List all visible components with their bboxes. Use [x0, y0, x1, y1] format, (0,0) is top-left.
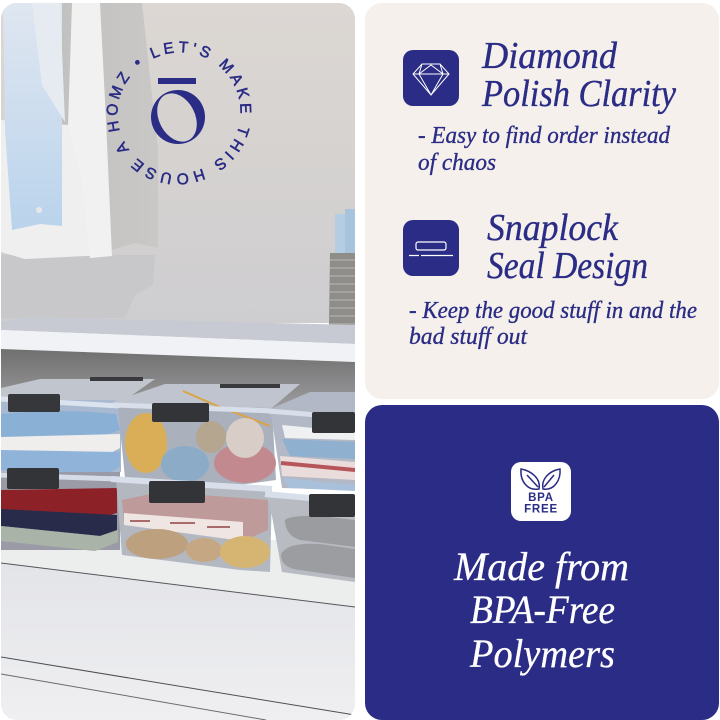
upper shelf: [1, 317, 355, 362]
circular slogan: LET'S MAKE THIS HOUSE A HOMZ •: [106, 41, 252, 185]
wall shadow under clothes: [1, 255, 155, 276]
logo mark: [149, 78, 205, 148]
text: seal description: bad stuff out: [409, 324, 528, 350]
text: clarity description: of chaos: [418, 150, 496, 176]
wall background: [1, 3, 355, 323]
heading: Made from BPA-Free Polymers: Polymers: [469, 631, 615, 676]
text: seal description: [409, 298, 697, 350]
text: seal description: - Keep the good stuff in and the: [409, 298, 697, 324]
heading: Diamond Polish Clarity: Diamond: [481, 35, 618, 77]
heading: Diamond Polish Clarity: Polish Clarity: [481, 73, 676, 115]
text: clarity description: - Easy to find order instead: [418, 123, 671, 149]
storage bin: top right: [268, 392, 355, 491]
books in basket: [335, 209, 355, 254]
lower shelf surface and drawers: [1, 540, 355, 720]
icon: snaplock seal: [403, 220, 459, 276]
panel: features: [365, 3, 719, 399]
heading: Made from BPA-Free Polymers: Made from: [453, 544, 629, 589]
storage bin: bottom middle with textiles and yarn: [111, 479, 272, 572]
hanging clothes: [1, 3, 158, 259]
heading: Made from BPA-Free Polymers: BPA-Free: [470, 587, 615, 632]
icon: BPA free leaf badge: BPA: [528, 492, 554, 504]
icon: diamond: [403, 50, 459, 106]
heading: Snaplock Seal Design: Snaplock: [487, 207, 619, 249]
shelf interior: [1, 349, 355, 408]
panel: BPA free: [365, 405, 719, 720]
storage bin: top left: [1, 377, 155, 473]
heading: Snaplock Seal Design: Seal Design: [487, 245, 648, 287]
storage bin: bottom left: [1, 468, 120, 551]
panel: closet photo: [1, 3, 355, 720]
icon: BPA free leaf badge: [511, 462, 571, 521]
heading: Made from BPA-Free Polymers: [453, 544, 629, 676]
storage bin: bottom right: [265, 494, 355, 582]
text: clarity description: [418, 123, 671, 176]
woven basket: [329, 253, 355, 325]
logo badge: [106, 41, 252, 185]
heading: Snaplock Seal Design: [487, 207, 648, 287]
icon: BPA free leaf badge: FREE: [524, 504, 558, 516]
storage bin: top middle with yarn: [112, 384, 300, 485]
heading: Diamond Polish Clarity: [481, 35, 676, 115]
